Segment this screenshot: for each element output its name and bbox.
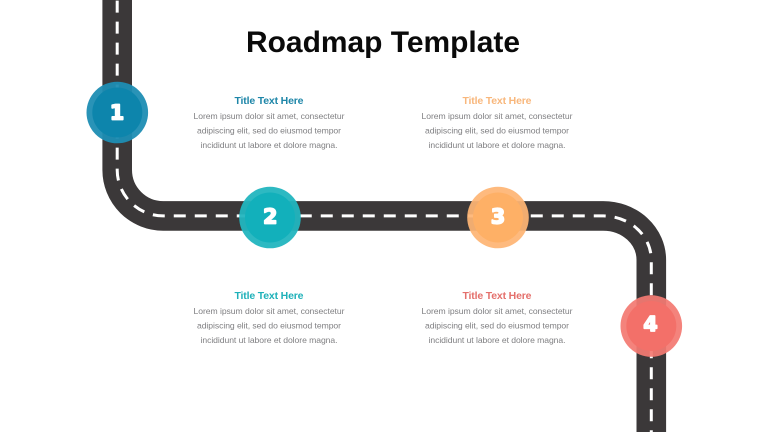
text block 4 (422, 290, 573, 345)
marker 3 (467, 187, 529, 248)
marker 4: 4 (643, 312, 658, 336)
text block 2: adipiscing elit, sed do eiusmod tempor (197, 320, 341, 330)
text block 1: Title Text Here (234, 95, 304, 107)
text block 3: Lorem ipsum dolor sit amet, consectetur (422, 111, 573, 121)
marker 4 (620, 295, 682, 357)
text block 4: adipiscing elit, sed do eiusmod tempor (425, 320, 569, 330)
text block 4: incididunt ut labore et dolore magna. (428, 335, 566, 345)
text block 4: Lorem ipsum dolor sit amet, consectetur (422, 306, 573, 316)
text block 1: adipiscing elit, sed do eiusmod tempor (197, 126, 341, 136)
text block 3 (422, 95, 573, 150)
text block 2: Title Text Here (234, 290, 304, 302)
marker 2: 2 (263, 205, 277, 229)
text block 3: adipiscing elit, sed do eiusmod tempor (425, 126, 569, 136)
text block 3: incididunt ut labore et dolore magna. (428, 140, 566, 150)
marker 2 (239, 187, 301, 248)
text block 2: Lorem ipsum dolor sit amet, consectetur (194, 306, 345, 316)
heading: Roadmap Template (246, 26, 520, 59)
text block 3: Title Text Here (462, 95, 532, 107)
text block 2 (194, 290, 345, 345)
marker 1: 1 (110, 100, 124, 124)
text block 1 (194, 95, 345, 150)
marker 3: 3 (491, 204, 505, 228)
marker 1 (86, 82, 148, 143)
text block 1: Lorem ipsum dolor sit amet, consectetur (194, 111, 345, 121)
text block 4: Title Text Here (462, 290, 532, 302)
text block 1: incididunt ut labore et dolore magna. (200, 140, 338, 150)
text block 2: incididunt ut labore et dolore magna. (200, 335, 338, 345)
road (117, 0, 651, 432)
